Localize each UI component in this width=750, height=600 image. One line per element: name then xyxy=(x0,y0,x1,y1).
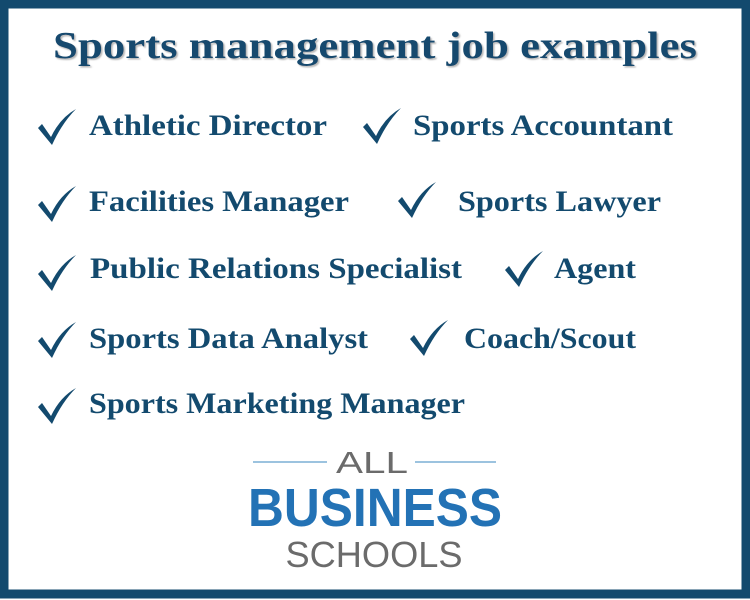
logo: BUSINESS xyxy=(248,478,502,538)
item: Facilities Manager xyxy=(38,185,349,222)
item: Sports Lawyer: Sports Lawyer xyxy=(458,185,661,218)
logo xyxy=(248,445,502,575)
logo: SCHOOLS xyxy=(286,534,462,575)
item: Coach/Scout xyxy=(410,320,636,356)
item: Sports Data Analyst: Sports Data Analyst xyxy=(89,322,368,355)
item: Athletic Director: Athletic Director xyxy=(89,109,327,142)
item: Public Relations Specialist: Public Relations Specialist xyxy=(90,252,462,285)
item: Sports Lawyer xyxy=(398,182,661,218)
logo: ALL xyxy=(336,445,408,480)
item: Agent: Agent xyxy=(554,252,636,285)
item: Agent xyxy=(505,251,636,287)
item: Athletic Director xyxy=(38,109,327,145)
item: Sports Marketing Manager: Sports Marketing Manager xyxy=(89,387,465,420)
title: Sports management job examples xyxy=(53,25,697,67)
item: Facilities Manager: Facilities Manager xyxy=(89,185,349,218)
item: Sports Accountant: Sports Accountant xyxy=(413,109,673,142)
item: Public Relations Specialist xyxy=(38,252,462,291)
item: Coach/Scout: Coach/Scout xyxy=(464,322,636,355)
job list xyxy=(38,108,673,424)
